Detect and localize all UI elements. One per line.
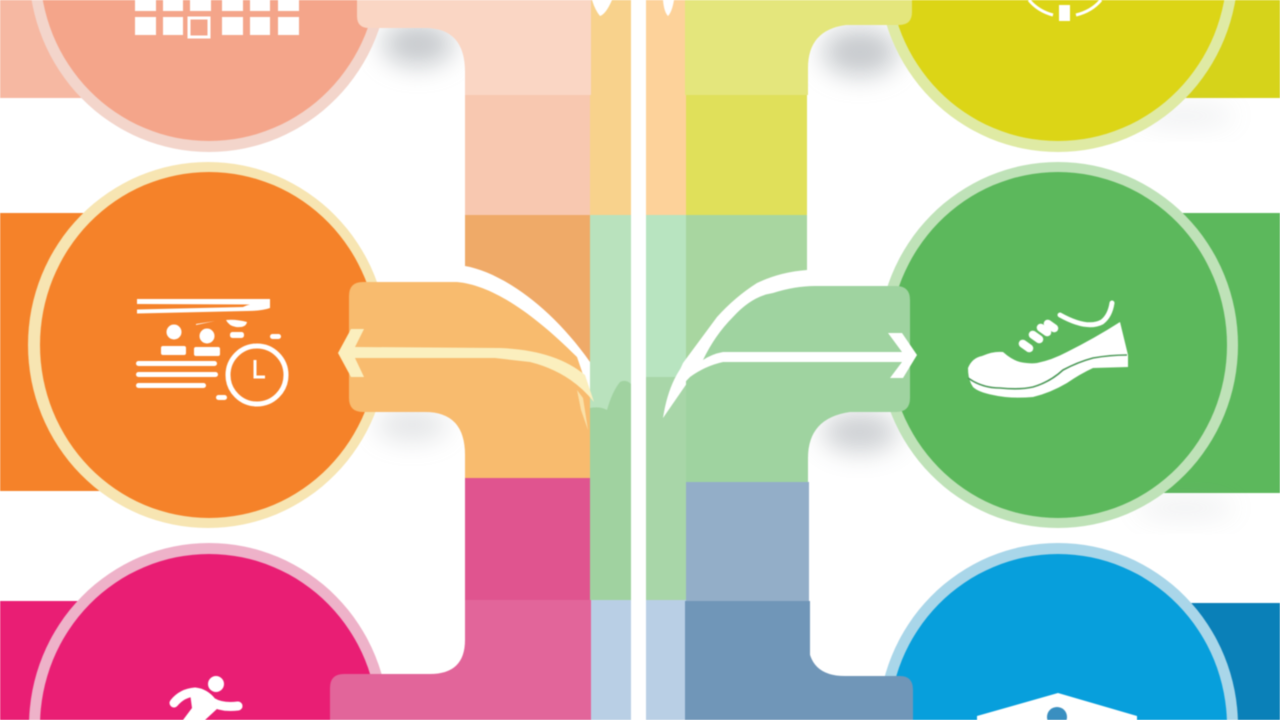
panel: right connector column xyxy=(685,0,810,720)
white arc over right tab xyxy=(663,270,825,418)
panel: central spine xyxy=(590,0,686,720)
connector tab: bottom left xyxy=(330,600,591,720)
arrow: cream left arrow xyxy=(338,329,594,430)
arrow: white right arrow xyxy=(663,333,917,418)
soft shadows beneath connector tabs xyxy=(376,22,1235,518)
icon: schedule with people and clock xyxy=(136,299,286,404)
circle: top right xyxy=(878,0,1238,152)
icon: graduation cap xyxy=(977,693,1137,720)
circle: middle right xyxy=(878,162,1238,528)
panel: left connector column xyxy=(465,0,591,720)
icon: calendar grid xyxy=(135,0,299,37)
white arc over left tab xyxy=(400,266,590,400)
connector tab: middle left xyxy=(338,266,594,478)
icon: running shoe xyxy=(968,303,1128,398)
circle: bottom left xyxy=(29,543,389,720)
circle: middle left xyxy=(28,162,388,528)
circle: bottom right xyxy=(878,543,1238,720)
icon: dial fragment xyxy=(1029,0,1101,21)
circle: top left xyxy=(29,0,389,152)
icon: running figure xyxy=(174,676,238,720)
connector tab: bottom right xyxy=(685,601,913,720)
connector tab: middle right xyxy=(663,270,917,482)
connector tab: top right xyxy=(685,0,912,95)
connector tab: top left xyxy=(357,0,591,95)
